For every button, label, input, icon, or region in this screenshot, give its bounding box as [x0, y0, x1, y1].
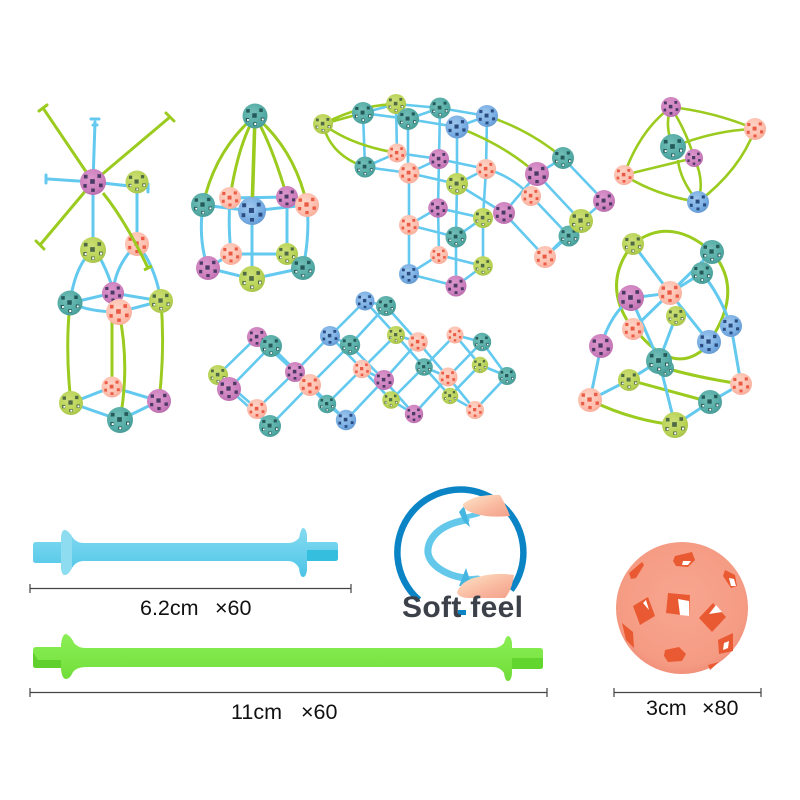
arch connector balls — [313, 94, 615, 296]
dimension line: ball — [614, 688, 761, 697]
model: dome cage — [191, 104, 319, 292]
label: 6.2cm x60: ×60 — [215, 596, 252, 620]
blue rod 6.2cm — [33, 528, 338, 577]
arch rods — [323, 104, 604, 286]
ring tower rods — [590, 231, 741, 425]
blue fragment — [458, 610, 466, 615]
green rod 11cm — [33, 634, 543, 681]
lattice connector balls — [208, 292, 516, 437]
lower fingertip — [457, 574, 514, 598]
model: large arch frame — [313, 94, 615, 296]
model: green pyramid — [614, 97, 766, 213]
pyramid connector balls — [614, 97, 766, 213]
label: 11cm x60: ×60 — [301, 700, 338, 724]
model: tower with star top — [36, 105, 174, 433]
bent rod — [428, 514, 478, 579]
upper fingertip — [463, 495, 510, 517]
dome connector balls — [191, 104, 319, 292]
lattice rods — [218, 301, 507, 426]
coral connector ball — [616, 542, 748, 674]
label: 11cm x60: 11cm — [231, 700, 282, 724]
label: 3cm x80: ×80 — [702, 696, 739, 720]
ring tower connector balls — [578, 233, 752, 438]
dome rods — [201, 116, 308, 279]
tower connector balls — [58, 169, 173, 433]
model: zigzag lattice — [208, 292, 516, 437]
label: 6.2cm x60: 6.2cm — [140, 596, 199, 620]
model: ring tower — [578, 231, 752, 438]
tower rods — [36, 105, 174, 420]
blue ring — [397, 489, 523, 600]
text: Soft feel: Soft feel — [402, 591, 523, 624]
hole highlights — [643, 561, 736, 650]
rod flanges — [459, 506, 470, 586]
label: 3cm x80: 3cm — [646, 696, 687, 720]
sphere body — [616, 542, 748, 674]
pyramid rods — [624, 107, 755, 202]
sphere holes — [622, 552, 737, 670]
dimension line: blue rod — [30, 584, 351, 593]
dimension line: green rod — [30, 688, 547, 697]
soft feel badge — [397, 489, 523, 624]
